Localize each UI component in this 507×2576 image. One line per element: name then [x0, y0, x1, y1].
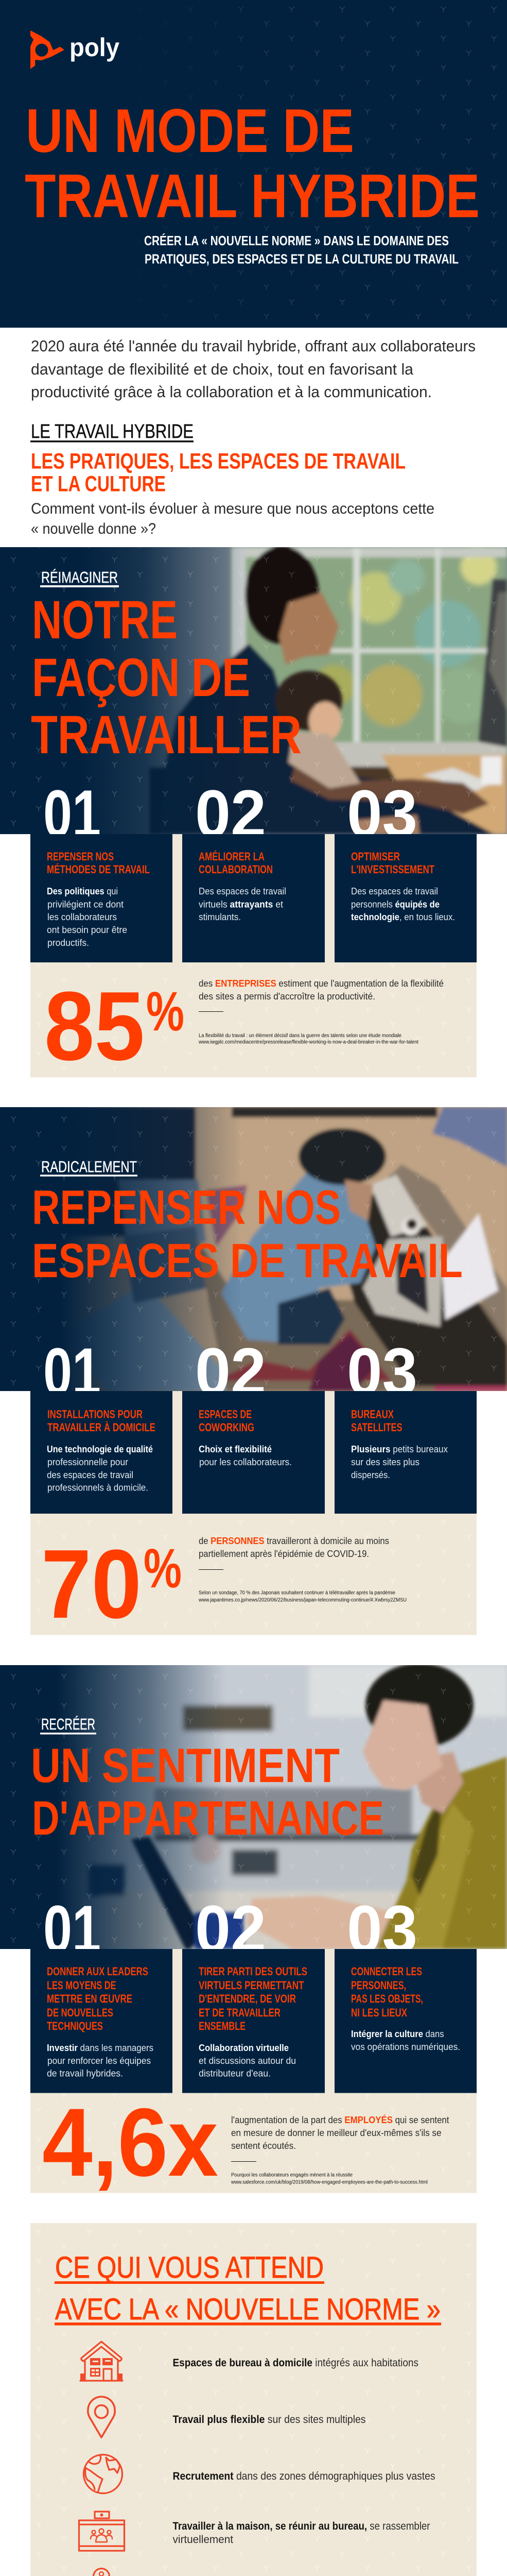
card: espaces de coworking: ESPACES DE: [199, 1408, 252, 1421]
section title: notre façon de travailler: TRAVAILLER: [31, 705, 302, 765]
card: améliorer la collaboration: [182, 834, 325, 962]
numbers 01 02 03: [43, 1334, 417, 1409]
heading: ce qui vous attend: AVEC LA « NOUVELLE NORME »: [55, 2293, 441, 2326]
card: tirer parti des outils virtuels: ET DE TRAVAILLER: [199, 2006, 281, 2019]
numbers 01 02 03: [43, 1891, 417, 1967]
numbers 01 02 03: 02: [195, 1891, 266, 1967]
section title: repenser nos espaces de travail: [32, 1180, 463, 1287]
section title: repenser nos espaces de travail: REPENSER NOS: [32, 1180, 341, 1234]
numbers 01 02 03: 02: [195, 1334, 266, 1409]
numbers 01 02 03: 03: [347, 776, 417, 851]
panel: hero header: [0, 0, 507, 328]
stat text: employés: [231, 2114, 449, 2185]
panel: beige backdrop 3: [30, 1949, 477, 2193]
stat: 70%: [41, 1530, 407, 1639]
numbers 01 02 03: 03: [347, 1334, 417, 1409]
stat: 85%: [44, 972, 444, 1081]
card: tirer parti des outils virtuels: Collaboration virtuelle: [199, 2042, 289, 2053]
stat text: personnes: de PERSONNES travailleront à domicile au moins: [199, 1535, 389, 1546]
card: repenser nos méthodes: [30, 834, 172, 962]
stat text: employés: Pourquoi les collaborateurs engagés mènent à la réussite: [231, 2172, 353, 2178]
card: installations domicile: [30, 1391, 172, 1514]
numbers 01 02 03: 02: [195, 776, 266, 851]
title: [25, 96, 480, 231]
stat: 70%: %: [144, 1537, 182, 1599]
icon: virtual meeting board: [79, 2512, 125, 2551]
card: donner aux leaders: LES MOYENS DE: [47, 1979, 116, 1992]
section heading: recréer: RECRÉER: [41, 1715, 95, 1733]
card: connecter les personnes: CONNECTER LES: [351, 1965, 422, 1978]
section title: notre façon de travailler: FAÇON DE: [32, 648, 250, 708]
question text: [31, 500, 434, 537]
card: tirer parti des outils virtuels: D'ENTENDRE, DE VOIR: [199, 1992, 296, 2005]
card: améliorer la collaboration: COLLABORATION: [199, 863, 273, 876]
heading: ce qui vous attend: CE QUI VOUS ATTEND: [55, 2251, 324, 2284]
card: optimiser l'investissement: technologie, en tous lieux.: [351, 911, 455, 922]
stat text: employés: www.salesforce.com/uk/blog/2019/08/how-engaged-employees-are-the-path-to-success.html: [231, 2179, 428, 2185]
stat text: entreprises: des sites a permis d'accroître la productivité.: [199, 991, 375, 1002]
card: espaces de coworking: [182, 1391, 325, 1514]
icon: globe: [83, 2454, 123, 2494]
section title: notre façon de travailler: NOTRE: [32, 590, 178, 650]
intro paragraph: [31, 337, 476, 401]
stat text: personnes: partiellement après l'épidémie de COVID-19.: [199, 1548, 369, 1559]
stat text: employés: en mesure de donner le meilleur d'eux-mêmes s'ils se: [231, 2127, 442, 2138]
title: UN MODE DE: [26, 96, 354, 165]
numbers 01 02 03: 03: [347, 1891, 417, 1967]
card: installations domicile: INSTALLATIONS POUR: [47, 1408, 143, 1421]
card: donner aux leaders: DONNER AUX LEADERS: [47, 1965, 148, 1978]
card: tirer parti des outils virtuels: ENSEMBLE: [199, 2020, 246, 2032]
panel: beige backdrop 1: [30, 834, 477, 1077]
text: travailler à la maison: virtuellement: [173, 2533, 233, 2546]
card: optimiser l'investissement: personnels équipés de: [351, 899, 440, 910]
card: connecter les personnes: Intégrer la culture dans: [351, 2028, 444, 2039]
intro paragraph: 2020 aura été l'année du travail hybride, offrant aux collaborateurs: [31, 337, 476, 355]
card: bureaux satellites: Plusieurs petits bureaux: [351, 1444, 448, 1454]
question text: « nouvelle donne »?: [31, 520, 156, 537]
stat text: employés: sentent écoutés.: [231, 2140, 296, 2151]
panel: ce qui vous attend: [30, 2223, 477, 2576]
icon: connected people: [81, 2569, 121, 2576]
heading: pratiques espaces culture: LES PRATIQUES, LES ESPACES DE TRAVAIL: [31, 449, 406, 474]
logo: poly: [30, 30, 119, 69]
card: bureaux satellites: [335, 1391, 477, 1514]
numbers 01 02 03: 01: [43, 1891, 101, 1967]
numbers 01 02 03: 01: [43, 776, 101, 851]
card: connecter les personnes: PAS LES OBJETS,: [351, 1992, 423, 2005]
text: espaces de bureau: Espaces de bureau à domicile intégrés aux habitations: [173, 2357, 418, 2369]
stat text: entreprises: des ENTREPRISES estiment que l'augmentation de la flexibilité: [199, 978, 444, 989]
card: optimiser l'investissement: OPTIMISER: [351, 850, 400, 863]
stat text: personnes: www.japantimes.co.jp/news/2020/06/22/business/japan-telecommuting-continue/#.Xwbrsy2ZMSU: [198, 1597, 407, 1603]
text: travailler à la maison: [173, 2520, 430, 2546]
section title: un sentiment d'appartenance: D'APPARTENANCE: [32, 1791, 384, 1845]
section title: notre façon de travailler: [31, 590, 302, 765]
text: travailler à la maison: Travailler à la maison, se réunir au bureau, se rassembler: [173, 2520, 430, 2532]
card: bureaux satellites: BUREAUX: [351, 1408, 394, 1421]
heading: pratiques espaces culture: [31, 449, 406, 497]
heading: le travail hybride: LE TRAVAIL HYBRIDE: [31, 421, 194, 443]
card: repenser nos méthodes: productifs.: [47, 937, 89, 948]
text: recrutement: Recrutement dans des zones démographiques plus vastes: [173, 2470, 435, 2482]
panel: beige backdrop 2: [30, 1391, 477, 1635]
card: espaces de coworking: COWORKING: [199, 1421, 254, 1434]
card: améliorer la collaboration: stimulants.: [199, 911, 241, 922]
card: donner aux leaders: TECHNIQUES: [47, 2020, 103, 2032]
section title: un sentiment d'appartenance: [31, 1738, 384, 1845]
photo: father and baby at computer: [0, 546, 507, 834]
card: bureaux satellites: SATELLITES: [351, 1421, 403, 1434]
card: repenser nos méthodes: les collaborateurs: [47, 911, 117, 922]
heading: pratiques espaces culture: ET LA CULTURE: [31, 472, 166, 497]
icon: house: [80, 2342, 123, 2381]
card: repenser nos méthodes: Des politiques qui: [47, 886, 118, 896]
card: repenser nos méthodes: privilégient ce dont: [47, 899, 124, 910]
section heading: réimaginer: RÉIMAGINER: [41, 568, 118, 586]
logo: poly: poly: [69, 33, 119, 62]
numbers 01 02 03: 01: [43, 1334, 101, 1409]
stat text: employés: l'augmentation de la part des EMPLOYÉS qui se sentent: [231, 2114, 449, 2125]
card: installations domicile: Une technologie de qualité: [47, 1444, 153, 1454]
question text: Comment vont-ils évoluer à mesure que nous acceptons cette: [31, 500, 434, 517]
stat text: personnes: [198, 1535, 407, 1603]
card: installations domicile: professionnels à domicile.: [47, 1482, 148, 1493]
card: tirer parti des outils virtuels: TIRER PARTI DES OUTILS: [199, 1965, 307, 1978]
section title: un sentiment d'appartenance: UN SENTIMENT: [31, 1738, 340, 1792]
card: donner aux leaders: DE NOUVELLES: [47, 2006, 113, 2019]
stat text: entreprises: La flexibilité du travail : un élément décisif dans la guerre des talents selon une étude mondiale: [199, 1033, 401, 1039]
card: donner aux leaders: [30, 1949, 172, 2093]
card: connecter les personnes: vos opérations numériques.: [351, 2041, 460, 2052]
stat: 85%: %: [146, 980, 184, 1042]
stat: 85%: 85: [44, 972, 145, 1081]
card: bureaux satellites: sur des sites plus: [351, 1456, 419, 1467]
section heading: radicalement: RADICALEMENT: [41, 1158, 137, 1176]
icon: location pin: [88, 2397, 115, 2437]
card: tirer parti des outils virtuels: [182, 1949, 325, 2093]
section heading: recréer: [40, 1715, 96, 1734]
card: espaces de coworking: Choix et flexibilité: [199, 1444, 272, 1454]
stat text: entreprises: www.iwgplc.com/mediacentre/pressrelease/flexible-working-is-now-a-deal-breaker-in-the-war-for-talent: [198, 1040, 418, 1045]
card: donner aux leaders: METTRE EN ŒUVRE: [47, 1992, 132, 2005]
card: améliorer la collaboration: AMÉLIORER LA: [199, 850, 265, 863]
card: connecter les personnes: [335, 1949, 477, 2093]
stat: 4,6x: [42, 2088, 449, 2196]
card: donner aux leaders: pour renforcer les équipes: [47, 2055, 151, 2066]
card: repenser nos méthodes: ont besoin pour être: [47, 924, 127, 935]
card: connecter les personnes: PERSONNES,: [351, 1979, 406, 1992]
card: espaces de coworking: pour les collaborateurs.: [199, 1456, 292, 1467]
card: donner aux leaders: de travail hybrides.: [47, 2068, 123, 2078]
card: bureaux satellites: dispersés.: [351, 1469, 390, 1480]
card: améliorer la collaboration: virtuels attrayants et: [199, 899, 283, 910]
card: connecter les personnes: NI LES LIEUX: [351, 2006, 407, 2019]
card: optimiser l'investissement: [335, 834, 477, 962]
card: repenser nos méthodes: MÉTHODES DE TRAVAIL: [47, 863, 150, 876]
card: installations domicile: TRAVAILLER À DOMICILE: [47, 1421, 155, 1434]
card: donner aux leaders: Investir dans les managers: [47, 2042, 153, 2053]
card: installations domicile: professionnelle pour: [47, 1456, 128, 1467]
heading: ce qui vous attend: [55, 2251, 441, 2326]
text: travail plus flexible: Travail plus flexible sur des sites multiples: [173, 2413, 365, 2426]
stat: 70%: 70: [41, 1530, 142, 1639]
card: repenser nos méthodes: REPENSER NOS: [47, 850, 114, 863]
card: améliorer la collaboration: Des espaces de travail: [199, 886, 286, 896]
numbers 01 02 03: [43, 776, 417, 851]
card: tirer parti des outils virtuels: et discussions autour du: [199, 2055, 296, 2066]
stat text: entreprises: [198, 978, 444, 1045]
card: optimiser l'investissement: Des espaces de travail: [351, 886, 438, 896]
photo: woman working on rug with laptop: [0, 1107, 507, 1391]
stat text: personnes: Selon un sondage, 70 % des Japonais souhaitent continuer à télétravailler après la pandémie: [199, 1590, 395, 1596]
card: installations domicile: des espaces de travail: [47, 1469, 133, 1480]
card: optimiser l'investissement: L'INVESTISSEMENT: [351, 863, 434, 876]
card: tirer parti des outils virtuels: distributeur d'eau.: [199, 2068, 271, 2078]
subtitle: [144, 233, 459, 267]
stat: 4,6x: 4,6x: [42, 2088, 218, 2196]
intro paragraph: productivité grâce à la collaboration et à la communication.: [31, 383, 432, 401]
photo: woman typing in kitchen: [0, 1663, 507, 1949]
card: tirer parti des outils virtuels: VIRTUELS PERMETTANT: [199, 1979, 304, 1992]
intro paragraph: davantage de flexibilité et de choix, tout en favorisant la: [31, 360, 414, 378]
